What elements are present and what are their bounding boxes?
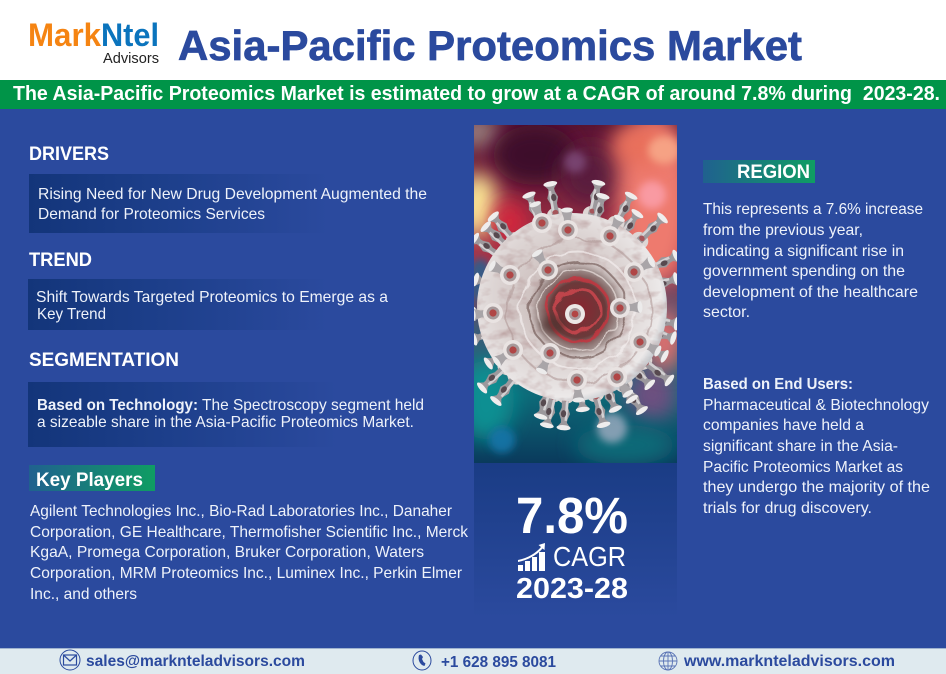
text block: end users: Based on End Users:: [703, 376, 853, 393]
virus sphere body: [477, 213, 667, 401]
text block: region: from the previous year,: [703, 222, 863, 239]
footer bar: [0, 648, 946, 674]
text block: region: sector.: [703, 304, 750, 321]
text block: region: [703, 201, 923, 321]
heading: drivers: DRIVERS: [29, 144, 109, 165]
icon: globe: [659, 652, 677, 670]
heading: segmentation: SEGMENTATION: [29, 350, 179, 371]
logo: MarkNtel Advisors: Mark: [28, 17, 101, 53]
panel: segmentation: Based on Technology:: [37, 397, 198, 414]
text block: end users: Pacific Proteomics Market as: [703, 459, 903, 476]
icon: email: [60, 650, 80, 670]
white header band: [0, 0, 946, 80]
text block: end users: [703, 376, 930, 517]
text block: region: development of the healthcare: [703, 284, 918, 301]
heading: key players: Key Players: [36, 470, 143, 491]
panel: trend: [28, 279, 388, 330]
logo: MarkNtel Advisors: Ntel: [101, 17, 159, 53]
text block: end users: significant share in the Asia-: [703, 438, 898, 455]
logo: MarkNtel Advisors: Advisors: [103, 51, 159, 67]
heading: trend: TREND: [29, 250, 92, 271]
callout: CAGR: 7.8%: [516, 487, 628, 544]
panel: segmentation: The Spectroscopy segment held: [202, 397, 424, 414]
text block: end users: Pharmaceutical & Biotechnology: [703, 397, 929, 414]
footer website: www.marknteladvisors.com: [683, 653, 895, 670]
footer phone: +1 628 895 8081: [441, 654, 556, 671]
panel: trend: Shift Towards Targeted Proteomics to Emerge as a: [36, 289, 388, 306]
panel: trend: Key Trend: [37, 306, 106, 323]
text block: region: government spending on the: [703, 263, 905, 280]
panel: drivers: Rising Need for New Drug Development Augmented the: [38, 186, 427, 203]
text block: end users: companies have held a: [703, 417, 864, 434]
green subtitle banner: The Asia-Pacific Proteomics Market is estimated to grow at a CAGR of around 7.8% during 2023-28.: [13, 83, 940, 105]
title: Asia-Pacific Proteomics Market: [178, 22, 802, 69]
callout: CAGR: [474, 463, 677, 618]
panel: drivers: Demand for Proteomics Services: [38, 206, 265, 223]
footer email: sales@marknteladvisors.com: [86, 653, 305, 670]
callout: CAGR: CAGR: [553, 541, 626, 572]
text block: region: This represents a 7.6% increase: [703, 201, 923, 218]
icon: growth bars and arrow: [518, 543, 545, 571]
virus surface bases: [470, 198, 665, 403]
logo: MarkNtel Advisors: [28, 17, 159, 67]
panel: drivers: [29, 174, 427, 233]
text block: end users: trials for drug discovery.: [703, 500, 872, 517]
image: virus illustration: [474, 125, 677, 463]
text block: key players list: [30, 503, 468, 603]
text block: region: indicating a significant rise in: [703, 243, 904, 260]
panel: segmentation: a sizeable share in the Asia-Pacific Proteomics Market.: [37, 414, 414, 431]
text block: key players list: Corporation, GE Healthcare, Thermofisher Scientific Inc., Merck: [30, 524, 468, 541]
heading: key players: [29, 465, 155, 491]
text block: key players list: Agilent Technologies Inc., Bio-Rad Laboratories Inc., Danaher: [30, 503, 452, 520]
text block: key players list: Corporation, MRM Proteomics Inc., Luminex Inc., Perkin Elmer: [30, 565, 462, 582]
text block: key players list: Inc., and others: [30, 586, 137, 603]
text block: end users: they undergo the majority of the: [703, 479, 930, 496]
heading: region: [703, 160, 815, 183]
text block: key players list: KgaA, Promega Corporation, Bruker Corporation, Waters: [30, 544, 424, 561]
callout: CAGR: 2023-28: [516, 573, 628, 605]
virus spikes: [467, 178, 683, 431]
heading: region: REGION: [737, 162, 810, 183]
panel: segmentation: [28, 382, 424, 447]
icon: phone: [413, 651, 431, 670]
